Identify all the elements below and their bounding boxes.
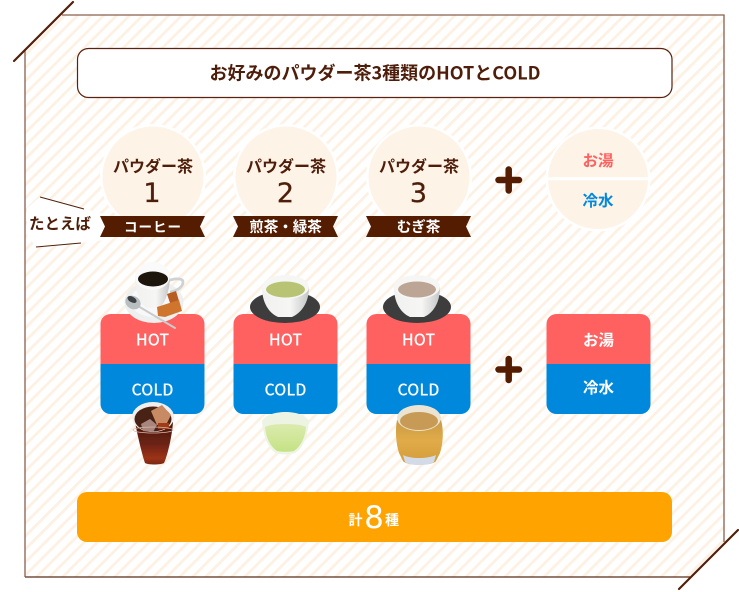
label: たとえば: [27, 197, 104, 247]
total bar: [77, 492, 672, 542]
icon: iced barley tea: [396, 405, 443, 465]
card: green tea hot and cold: [234, 314, 338, 414]
powder tea 3 badge: 3: [410, 178, 427, 209]
card: hot water and cold water: お湯: [583, 328, 614, 350]
powder tea 1 badge: パウダー茶: [113, 153, 193, 177]
powder tea 3 badge: [366, 124, 472, 237]
card: barley tea hot and cold: [366, 314, 470, 414]
hot water and cold water circle: 冷水: [582, 189, 614, 211]
icon: hot barley tea: [383, 275, 451, 323]
title: お好みのパウダー茶3種類のHOTとCOLD: [209, 60, 541, 86]
powder tea 2 badge: 2: [277, 178, 294, 209]
powder tea 1 badge: 1: [143, 178, 161, 209]
label: たとえば: たとえば: [29, 212, 91, 234]
icon: iced coffee: [132, 402, 174, 464]
title: [78, 48, 672, 98]
icon: iced green tea: [262, 412, 309, 454]
card: coffee hot and cold: HOT: [136, 326, 169, 350]
hot water and cold water circle: [545, 126, 651, 232]
card: hot water and cold water: 冷水: [583, 376, 614, 398]
card: coffee hot and cold: [100, 314, 204, 414]
powder tea 1 badge: コーヒー: [124, 216, 182, 236]
powder tea 3 badge: むぎ茶: [397, 216, 441, 237]
icon: hot green tea: [250, 275, 320, 323]
total bar: 種: [385, 510, 399, 530]
powder tea 1 badge: [100, 124, 206, 237]
card: barley tea hot and cold: HOT: [402, 326, 435, 350]
powder tea 3 badge: パウダー茶: [379, 153, 459, 177]
card: hot water and cold water: [546, 314, 650, 414]
plus sign top: [498, 170, 519, 190]
powder tea 2 badge: 煎茶・緑茶: [249, 216, 322, 237]
powder tea 2 badge: [233, 124, 339, 237]
card: green tea hot and cold: COLD: [265, 376, 306, 400]
plus sign bottom: [498, 359, 519, 380]
total bar: 8: [364, 500, 384, 536]
card: green tea hot and cold: HOT: [269, 326, 302, 350]
hot water and cold water circle: お湯: [582, 149, 614, 171]
card: barley tea hot and cold: COLD: [398, 376, 439, 400]
total bar: 計: [348, 510, 362, 530]
card: coffee hot and cold: COLD: [132, 376, 173, 400]
powder tea 2 badge: パウダー茶: [246, 153, 326, 177]
icon: hot coffee with biscuits: [123, 262, 184, 328]
